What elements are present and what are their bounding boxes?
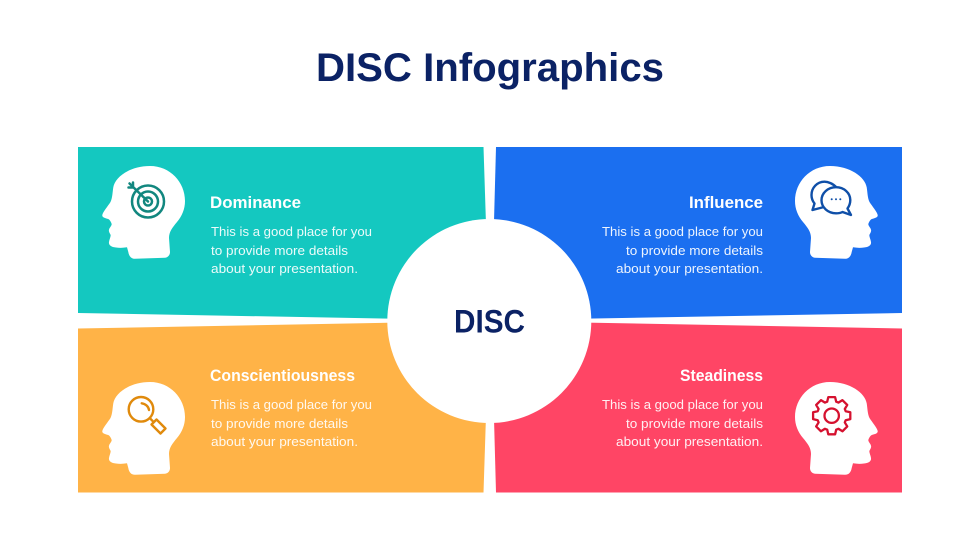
heading: Influence	[689, 193, 763, 212]
body text: about your presentation.	[616, 261, 763, 276]
body text: to provide more details	[626, 243, 764, 258]
body text: about your presentation.	[211, 261, 358, 276]
orange background	[78, 322, 486, 492]
body text: about your presentation.	[616, 434, 763, 449]
body text	[211, 397, 372, 449]
blue background	[494, 147, 902, 319]
title: DISC Infographics	[316, 46, 664, 90]
panel: dominance	[78, 147, 486, 319]
body text: to provide more details	[626, 416, 764, 431]
body text: to provide more details	[211, 243, 349, 258]
body text: This is a good place for you	[602, 397, 763, 412]
red background	[494, 322, 902, 492]
panel: influence	[494, 147, 902, 319]
panel: steadiness	[494, 322, 902, 492]
body text: to provide more details	[211, 416, 349, 431]
heading: Conscientiousness	[210, 366, 355, 385]
body text	[602, 224, 764, 276]
panel: conscientiousness	[78, 322, 486, 492]
heading: Steadiness	[680, 366, 763, 385]
center label: DISC	[454, 304, 525, 340]
icon: head with target	[102, 166, 185, 259]
center circle	[387, 219, 591, 423]
body text	[211, 224, 372, 276]
body text: This is a good place for you	[211, 397, 372, 412]
icon: head with gear	[795, 382, 878, 475]
body text: about your presentation.	[211, 434, 358, 449]
body text: This is a good place for you	[211, 224, 372, 239]
icon: head with speech bubbles	[795, 166, 878, 259]
body text: This is a good place for you	[602, 224, 763, 239]
body text	[602, 397, 764, 449]
heading: Dominance	[210, 193, 301, 212]
teal background	[78, 147, 486, 319]
icon: head with magnifier	[102, 382, 185, 475]
